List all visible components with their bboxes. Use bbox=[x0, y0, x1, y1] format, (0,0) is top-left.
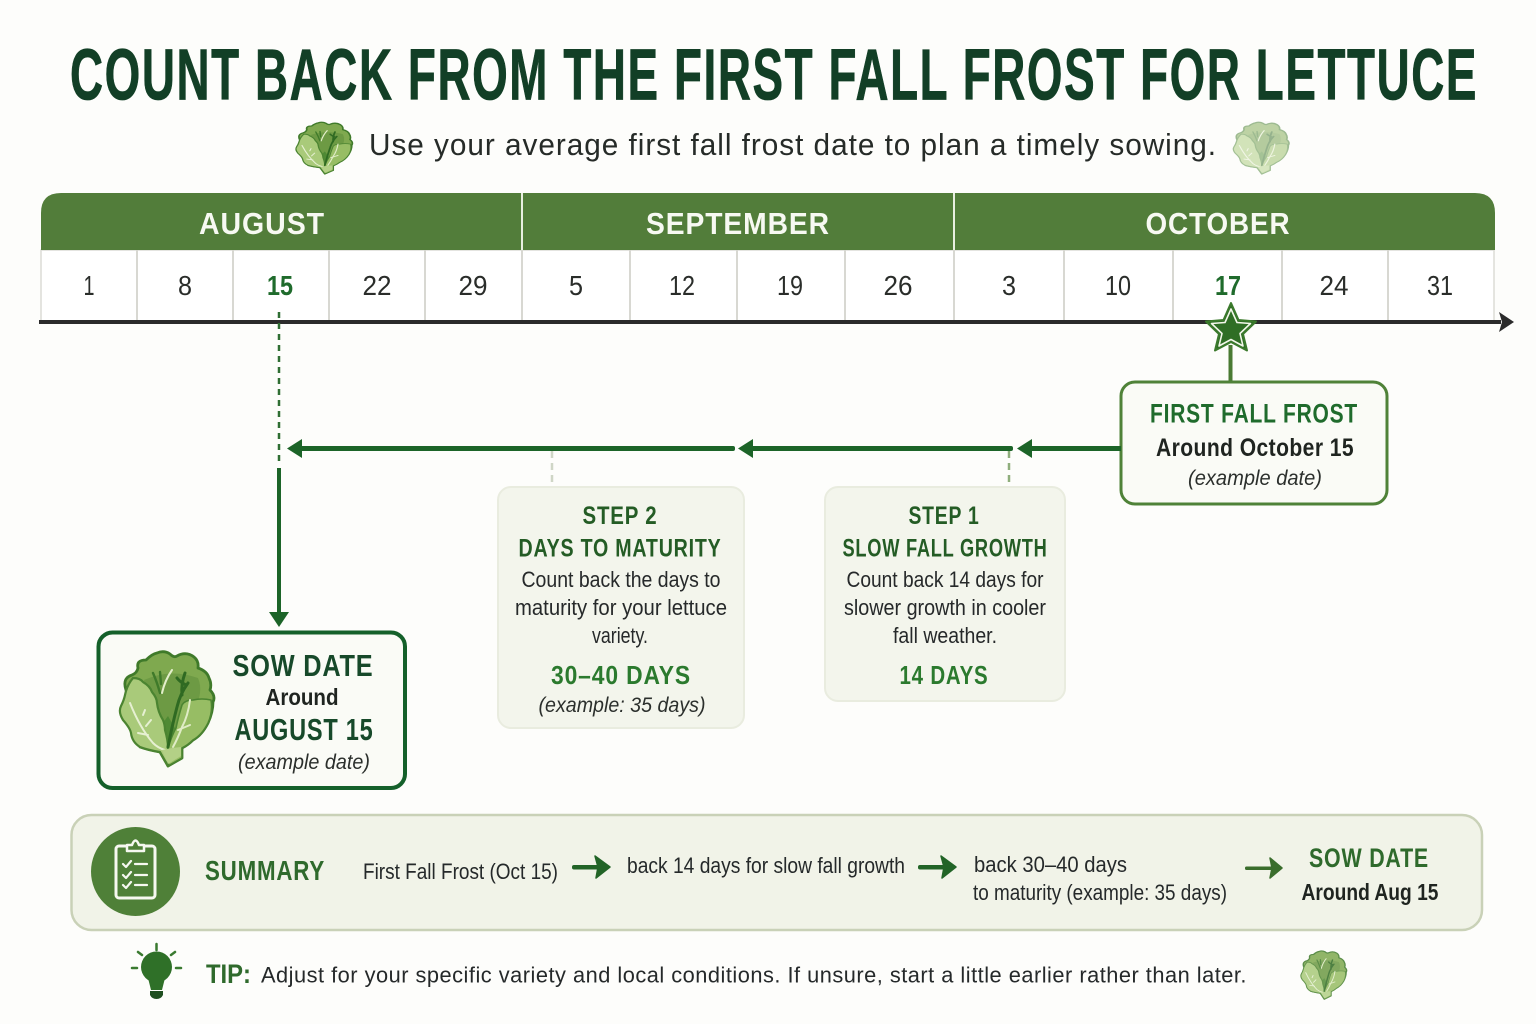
month header band: AUGUST bbox=[199, 206, 325, 241]
sow date heading: SOW DATE bbox=[232, 648, 374, 683]
panel: step 1 bbox=[825, 487, 1065, 701]
calendar date row: 17 bbox=[1215, 270, 1241, 301]
month header band: OCTOBER bbox=[1146, 206, 1290, 241]
step 2 heading: DAYS TO MATURITY bbox=[518, 534, 722, 562]
step 1 value: 14 DAYS bbox=[900, 660, 988, 690]
step 2 description bbox=[515, 567, 727, 648]
icon: pale lettuce right of subtitle bbox=[1233, 122, 1289, 174]
calendar date row: 1 bbox=[84, 270, 94, 301]
calendar date row: 22 bbox=[362, 270, 392, 301]
calendar date row: 12 bbox=[669, 270, 695, 301]
count-back arrow: frost to step 1 bbox=[1017, 439, 1121, 458]
calendar date row: 24 bbox=[1320, 270, 1348, 301]
panel: sow date bbox=[98, 632, 405, 788]
summary step: frost: First Fall Frost (Oct 15) bbox=[363, 859, 558, 884]
step 1 heading: SLOW FALL GROWTH bbox=[842, 534, 1048, 562]
subtitle: Use your average first fall frost date to plan a timely sowing. bbox=[369, 127, 1217, 162]
summary step: maturity bbox=[973, 852, 1227, 905]
step 2 description: maturity for your lettuce bbox=[515, 595, 727, 620]
summary step: slow growth: back 14 days for slow fall growth bbox=[627, 853, 905, 878]
icon: lettuce near tip bbox=[1301, 951, 1347, 999]
icon: large lettuce bbox=[120, 652, 214, 766]
step 1 description: Count back 14 days for bbox=[846, 567, 1044, 592]
step 1 description: fall weather. bbox=[893, 623, 997, 648]
calendar date row: 10 bbox=[1105, 270, 1131, 301]
month header band bbox=[41, 193, 1495, 250]
panel: first fall frost bbox=[1121, 382, 1387, 504]
calendar date row: 15 bbox=[267, 270, 293, 301]
calendar timeline bbox=[39, 193, 1514, 332]
calendar date row bbox=[41, 250, 1494, 321]
calendar date row: 29 bbox=[458, 270, 488, 301]
panel: summary bbox=[72, 815, 1482, 930]
arrow bbox=[572, 856, 610, 878]
count-back arrow: step 2 bbox=[287, 439, 735, 458]
calendar date row: 8 bbox=[178, 270, 192, 301]
frost date: Around October 15 bbox=[1156, 434, 1354, 462]
frost heading: FIRST FALL FROST bbox=[1150, 398, 1358, 428]
dashed connector: step 2 bbox=[551, 451, 553, 487]
icon: frost star marker bbox=[1206, 303, 1256, 350]
frost note: (example date) bbox=[1188, 467, 1322, 490]
dashed connector: step 1 bbox=[1008, 451, 1010, 487]
sow date around: Around bbox=[266, 684, 338, 710]
icon: lettuce left of subtitle bbox=[296, 122, 352, 174]
count-back arrow: step 1 bbox=[738, 439, 1013, 458]
sow date note: (example date) bbox=[238, 751, 370, 774]
sow date value: AUGUST 15 bbox=[234, 712, 374, 747]
step 2 note: (example: 35 days) bbox=[538, 694, 706, 717]
step 2 description: Count back the days to bbox=[522, 567, 720, 592]
tip label: TIP: bbox=[206, 959, 251, 989]
step 2 value: 30–40 DAYS bbox=[551, 660, 691, 690]
summary sow value: Around Aug 15 bbox=[1302, 879, 1439, 905]
step 2 description: variety. bbox=[592, 623, 648, 648]
step 1 label: STEP 1 bbox=[908, 502, 980, 530]
summary step: maturity: to maturity (example: 35 days) bbox=[973, 880, 1227, 905]
summary sow date: SOW DATE bbox=[1309, 843, 1429, 873]
month header band: SEPTEMBER bbox=[646, 206, 830, 241]
arrow bbox=[1245, 858, 1282, 878]
step 2 label: STEP 2 bbox=[582, 502, 658, 530]
summary heading: SUMMARY bbox=[205, 855, 325, 886]
calendar date row: 31 bbox=[1427, 270, 1453, 301]
arrow bbox=[918, 856, 956, 878]
calendar date row: 26 bbox=[884, 270, 912, 301]
icon: light bulb bbox=[132, 944, 181, 999]
calendar date row: 5 bbox=[569, 270, 583, 301]
dashed drop line from August 15 bbox=[278, 312, 280, 466]
arrow down to sow date bbox=[269, 468, 289, 627]
step 1 description: slower growth in cooler bbox=[844, 595, 1046, 620]
step 1 description bbox=[844, 567, 1046, 648]
panel: step 2 bbox=[498, 487, 744, 728]
timeline arrow bbox=[39, 312, 1514, 332]
icon: clipboard bbox=[91, 827, 180, 916]
calendar date row: 3 bbox=[1002, 270, 1016, 301]
calendar date row: 19 bbox=[777, 270, 803, 301]
tip text: Adjust for your specific variety and local conditions. If unsure, start a little earlier rather than later. bbox=[261, 962, 1247, 988]
frost connector line bbox=[1228, 345, 1232, 383]
summary step: maturity: back 30–40 days bbox=[974, 852, 1127, 877]
